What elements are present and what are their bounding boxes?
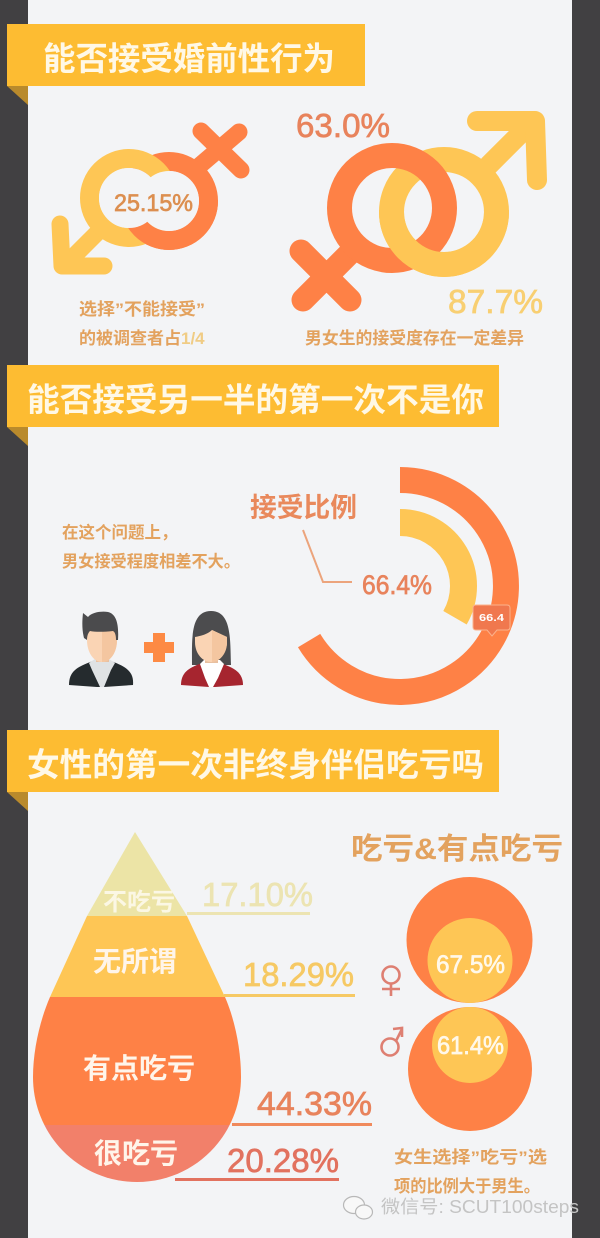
caption: women greater than men: [394, 1147, 547, 1196]
caption: women greater than men: 女生选择”吃亏”选: [394, 1147, 547, 1167]
chart: interlocked gender symbols 25.15%: 25.15%: [114, 190, 193, 217]
icon: wechat logo: [344, 1196, 372, 1219]
band label: big loss: 很吃亏: [94, 1138, 178, 1169]
caption: one quarter cannot accept: [79, 299, 205, 348]
band label: indifferent: 无所谓: [93, 946, 177, 977]
value: 20.28%: [175, 1142, 339, 1181]
icon: male symbol: [382, 1028, 402, 1056]
value: 17.10%: 17.10%: [202, 876, 313, 913]
icon: woman: [181, 611, 243, 687]
chart: female circle 67.5%: [406, 877, 532, 1003]
icon: plus: [144, 633, 174, 662]
tag: 66.4: 66.4: [479, 612, 504, 624]
chart: acceptance radial rings: [309, 480, 510, 692]
heading: premarital sex banner: [7, 24, 365, 105]
text block: small difference: 在这个问题上，: [62, 522, 178, 542]
label: acceptance ratio: 接受比例: [250, 493, 357, 523]
heading: women first time banner: 女性的第一次非终身伴侣吃亏吗: [27, 747, 484, 783]
heading: partner first time banner: 能否接受另一半的第一次不是你: [27, 382, 484, 418]
icon: man: [69, 612, 133, 687]
value: 20.28%: 20.28%: [227, 1142, 339, 1179]
caption: acceptance difference: 男女生的接受度存在一定差异: [305, 328, 524, 348]
caption: women greater than men: 项的比例大于男生。: [394, 1177, 540, 1196]
heading: premarital sex banner: 能否接受婚前性行为: [43, 41, 335, 77]
tag: 66.4: [473, 605, 510, 636]
chart: male circle 61.4%: [408, 1007, 532, 1131]
icon: female symbol: [382, 966, 400, 996]
caption: one quarter cannot accept: 选择”不能接受”: [79, 299, 205, 319]
band label: somewhat a loss: 有点吃亏: [83, 1053, 195, 1084]
heading: loss and somewhat a loss: 吃亏&有点吃亏: [351, 833, 563, 866]
value: 66.4%: 66.4%: [362, 570, 432, 600]
watermark: account name: 微信号: SCUT100steps: [381, 1197, 579, 1217]
heading: women first time banner: [7, 730, 499, 811]
heading: partner first time banner: [7, 365, 499, 446]
text block: small difference: [62, 522, 240, 571]
value: female 63.0%: 63.0%: [296, 107, 390, 144]
value: 18.29%: 18.29%: [243, 956, 354, 993]
chart: large interlocked gender symbols: [301, 121, 537, 300]
value: 44.33%: 44.33%: [257, 1085, 372, 1122]
chart: interlocked gender symbols 25.15%: [60, 131, 241, 266]
leader line: [303, 530, 352, 582]
value: male 87.7%: 87.7%: [448, 283, 543, 320]
chart: teardrop breakdown: [30, 830, 245, 1185]
band label: not a loss: 不吃亏: [103, 889, 175, 916]
caption: one quarter cannot accept: 的被调查者占1/4: [79, 328, 205, 348]
chart: female circle 67.5%: 67.5%: [436, 951, 505, 979]
text block: small difference: 男女接受程度相差不大。: [62, 551, 240, 571]
chart: male circle 61.4%: 61.4%: [437, 1032, 504, 1060]
